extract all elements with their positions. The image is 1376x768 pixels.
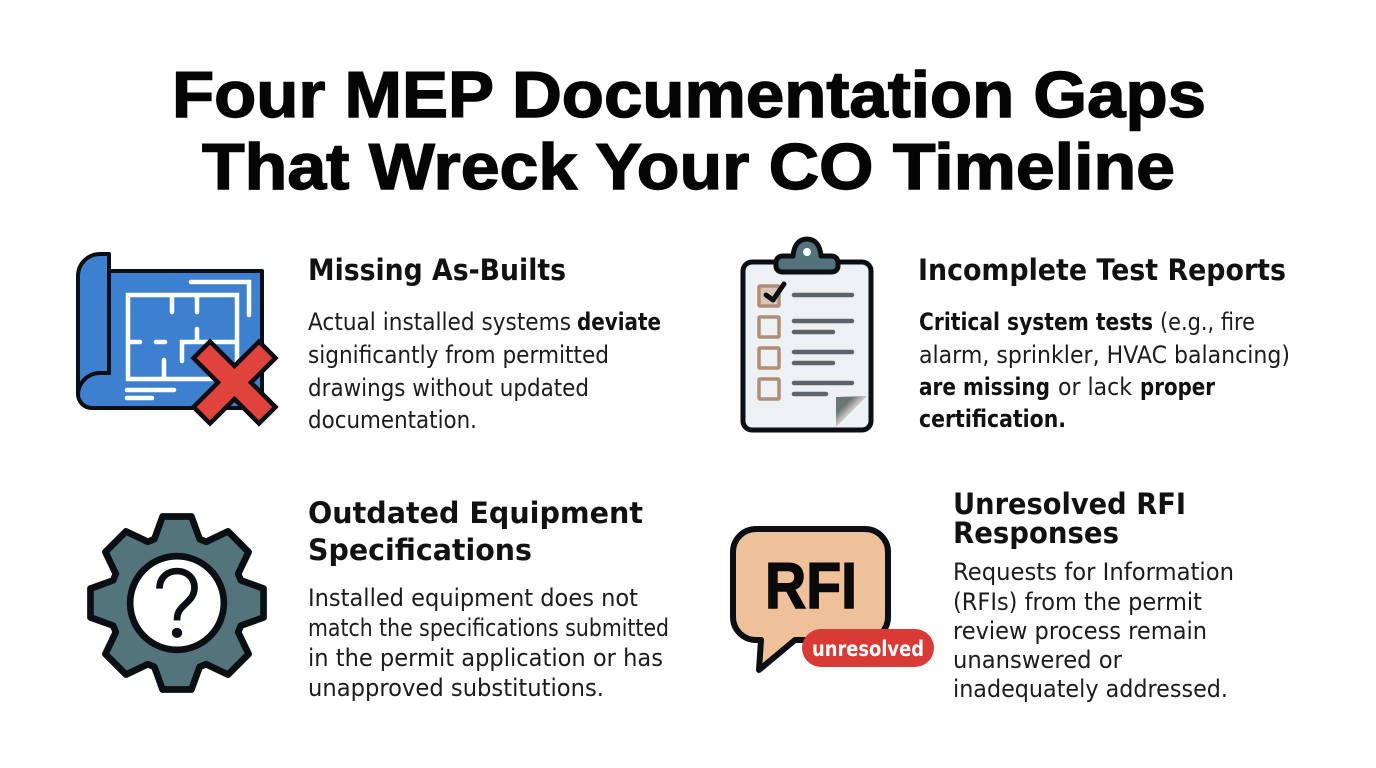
text block: incomplete test reports: are missing [919,373,1050,401]
title [172,58,1206,203]
heading: incomplete test reports: Incomplete Test Reports [918,253,1286,287]
heading: unresolved RFI responses [953,487,1186,550]
text block: unresolved RFI responses [953,558,1234,703]
heading: missing as-builts: Missing As-Builts [308,253,566,287]
text block: outdated equipment specifications: match the specifications submitted [308,614,669,642]
panel: incomplete test reports [743,239,1290,433]
text block: missing as-builts: documentation. [308,406,477,434]
text block: outdated equipment specifications: Installed equipment does not [308,584,638,612]
text block: outdated equipment specifications: in the permit application or has [308,644,663,672]
text block: incomplete test reports: Critical system tests [919,308,1153,336]
title: Four MEP Documentation Gaps [172,58,1206,131]
heading: outdated equipment specifications: Specifications [308,533,532,567]
icon: RFI speech bubble with unresolved badge: RFI [765,549,857,622]
text block: missing as-builts: deviate [577,308,661,336]
heading: unresolved RFI responses: Responses [953,516,1119,550]
icon: RFI speech bubble with unresolved badge: unresolved [812,637,924,661]
text block: missing as-builts: significantly from permitted [308,341,609,369]
text block: unresolved RFI responses: Requests for Information [953,558,1234,586]
icon: clipboard checklist [743,239,871,430]
text block: missing as-builts: Actual installed systems [308,308,571,336]
title: That Wreck Your CO Timeline [202,130,1175,203]
heading: unresolved RFI responses: Unresolved RFI [953,487,1186,521]
text block: missing as-builts: drawings without updated [308,374,589,402]
text block: unresolved RFI responses: (RFIs) from the permit [953,588,1202,616]
panel: missing as-builts [78,253,661,434]
text block: unresolved RFI responses: review process remain [953,617,1207,645]
heading: outdated equipment specifications: Outdated Equipment [308,496,643,530]
heading: outdated equipment specifications [308,496,643,567]
text block: outdated equipment specifications: unapproved substitutions. [308,674,604,702]
panel: unresolved RFI responses [733,487,1234,703]
text block: missing as-builts [308,308,661,434]
text block: incomplete test reports: certification. [919,405,1066,433]
text block: unresolved RFI responses: unanswered or [953,646,1122,674]
icon: RFI speech bubble with unresolved badge [733,529,934,670]
text block: incomplete test reports [919,308,1290,433]
text block: unresolved RFI responses: inadequately addressed. [953,675,1228,703]
text block: incomplete test reports: or lack [1058,373,1132,401]
text block: incomplete test reports: alarm, sprinkler, HVAC balancing) [919,341,1290,369]
text block: incomplete test reports: (e.g., fire [1160,308,1255,336]
icon: blueprint with red X [78,254,276,424]
icon: gear with question mark [90,516,264,690]
panel: outdated equipment specifications [90,496,669,702]
text block: incomplete test reports: proper [1140,373,1215,401]
text block: outdated equipment specifications [308,584,669,702]
